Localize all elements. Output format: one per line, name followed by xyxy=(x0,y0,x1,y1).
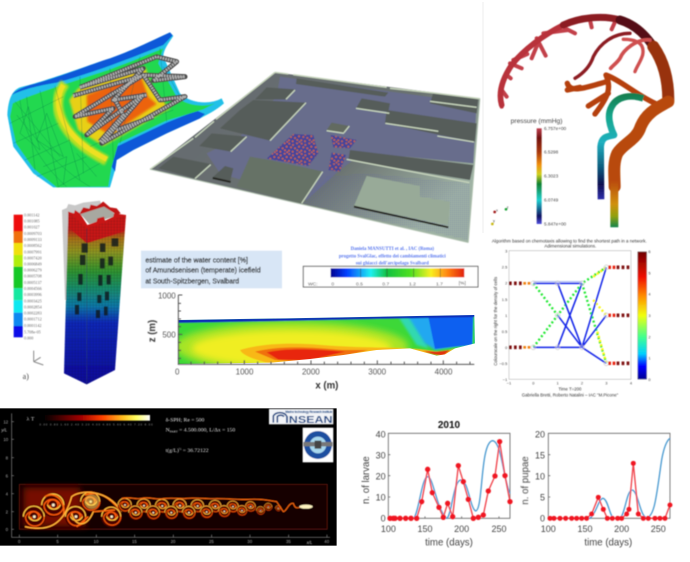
tower: colour legend: 0.001027 xyxy=(24,225,40,230)
stent: surface mesh xyxy=(10,48,180,187)
wake: axis labels: 2 xyxy=(6,509,9,514)
wake: large eddies xyxy=(23,505,46,528)
panel: chemotaxis network: 1 xyxy=(648,356,651,361)
tower: colour legend: 0.001085 xyxy=(24,219,40,224)
panel: chemotaxis network xyxy=(492,239,651,397)
glacier: axes and labels xyxy=(147,291,474,391)
tower: colour legend: 0.0001142 xyxy=(24,323,42,328)
tower: colour legend: 0.0004566 xyxy=(24,286,42,291)
wake: axis labels: 15 xyxy=(132,539,137,544)
glacier: axes and labels: 2000 xyxy=(302,367,320,376)
tower: battlement rear xyxy=(80,202,121,215)
wake: lower vortex row xyxy=(128,505,143,520)
wake: axis labels: 10 xyxy=(94,539,99,544)
glacier: axes and labels: x (m) xyxy=(315,380,338,391)
network: tick labels: 2.5 xyxy=(502,265,508,270)
pupae: axis tick labels: 10 xyxy=(535,471,545,481)
larvae: axis tick labels: 40 xyxy=(376,429,386,439)
panel: chemotaxis network: 6 xyxy=(648,249,651,254)
tower: corner edge xyxy=(86,228,88,384)
tower: colour legend: 0.0006849 xyxy=(24,261,42,266)
panel: pupae chart: 200 xyxy=(614,524,629,534)
wake: run parameters: ½ xyxy=(179,447,182,451)
stent: blue lower band xyxy=(112,111,205,172)
tower: top opening xyxy=(80,206,117,224)
glacier: axes and labels: 500 xyxy=(162,330,176,339)
panel: pupae chart: 250 xyxy=(651,524,666,534)
stent: wire body xyxy=(73,57,185,143)
stent: heated centre xyxy=(69,67,170,146)
network: y axis label: Colourscale on the right for the density of cells xyxy=(493,277,498,366)
glacier: WC legend: 0.7 xyxy=(382,281,389,287)
tower: colour legend: 0.0003425 xyxy=(24,298,42,303)
pupae: axis tick labels: 0 xyxy=(540,514,545,524)
glacier: WC legend: 1.7 xyxy=(436,281,443,287)
tower: colour legend: 0.001142 xyxy=(24,213,39,218)
plate: dark sheltered surfaces xyxy=(158,78,478,182)
wake: axis labels: y/L xyxy=(0,428,8,433)
vessels: main trunk xyxy=(614,102,668,187)
wake: axis labels: 5 xyxy=(56,539,59,544)
orientation axes: z xyxy=(507,205,509,209)
glacier: contour field xyxy=(178,315,475,364)
vessels: superior arch front xyxy=(500,25,563,105)
panel: SPH vortex wake: INSEAN xyxy=(285,415,333,426)
tower: undeformed ghost xyxy=(62,201,103,300)
plate: main particle cluster xyxy=(267,134,318,166)
glacier: WC legend: 1.2 xyxy=(409,281,416,287)
network: light top edge xyxy=(533,280,582,283)
pupae: observed markers xyxy=(550,463,670,518)
pressure legend: 5.847e+00 xyxy=(544,222,567,227)
glacier: WC legend xyxy=(303,266,478,287)
wake: red glow xyxy=(23,487,87,527)
panel: larvae chart: n. of larvae xyxy=(361,456,372,504)
panel: larvae chart: 250 xyxy=(491,524,506,534)
pressure legend: pressure (mmHg) xyxy=(511,118,562,125)
larvae: axis tick labels: 0 xyxy=(381,514,386,524)
network: title: Algorithm based on chemotaxis allowing to find the shortest path in a network. xyxy=(492,239,647,244)
stent: wire highlight xyxy=(73,57,185,143)
wake: axis labels: 30 xyxy=(247,539,253,544)
network: tick labels: 2 xyxy=(505,281,508,286)
tower: colour legend xyxy=(14,213,43,340)
pupae: axis titles: time (days) xyxy=(584,538,632,549)
vessels: deep red branches xyxy=(575,33,630,78)
panel: pupae chart: n. of pupae xyxy=(520,456,531,505)
wake: axis labels xyxy=(0,419,330,545)
tower: battlement xyxy=(68,210,126,243)
pupae: frame xyxy=(548,433,670,518)
glacier: WC legend: 0.5 xyxy=(356,281,363,287)
larvae: model curve xyxy=(388,441,510,518)
panel: stent finite element model xyxy=(7,32,224,187)
panel: pupae chart xyxy=(520,429,670,549)
pupae: observed line xyxy=(550,463,670,518)
wake: run parameters xyxy=(166,417,235,454)
pressure legend: 6.5298 xyxy=(544,149,559,154)
wake: bright eddy core xyxy=(84,494,99,509)
wake: axis labels: 0 xyxy=(6,527,9,532)
network: tick labels xyxy=(499,248,508,382)
plate: raised walls xyxy=(150,72,480,203)
wake: colour bar xyxy=(43,415,150,421)
wake: axis labels: 40 xyxy=(324,539,330,544)
pressure legend xyxy=(511,118,567,227)
wake: axis labels: 12 xyxy=(3,419,9,424)
panel: chemotaxis network: −1 xyxy=(507,381,512,386)
plate: dark slots xyxy=(213,178,448,227)
network: tick labels: 0.5 xyxy=(502,329,508,334)
plate: upper right cluster xyxy=(331,135,357,148)
wake: axis labels: 0 xyxy=(18,539,21,544)
tower: colour legend: 5.708e-05 xyxy=(24,329,41,334)
plate: main particle cluster water xyxy=(267,134,318,166)
panel: chemotaxis network: 0 xyxy=(648,377,651,382)
panel: tower displacement model xyxy=(14,201,126,384)
panel: SPH vortex wake: Marine technology Research Institute xyxy=(285,410,333,414)
wake: black background xyxy=(0,408,337,546)
wake: INSEAN logo xyxy=(269,409,333,424)
wake: axis labels: 6 xyxy=(6,473,9,478)
stent: orange core xyxy=(87,74,157,135)
tower: colour legend: 0.0009133 xyxy=(24,237,42,242)
glacier: project credit: Daniela MANSUTTI et al. , IAC (Roma) xyxy=(351,247,434,252)
panel: glacier water content xyxy=(141,247,478,391)
larvae: observed markers xyxy=(390,442,510,518)
wake: axis labels: 25 xyxy=(209,539,214,544)
plate: lighter obstacle xyxy=(354,176,450,225)
wake: round badge xyxy=(303,428,333,462)
tower: left face xyxy=(64,212,87,384)
panel: SPH vortex wake: 0.00 0.80 1.60 2.40 3.20 4.00 4.80 5.60 6.40 7.20 8.00 xyxy=(39,423,153,427)
glacier: axes and labels: 1000 xyxy=(236,367,254,376)
wake: axis labels: 8 xyxy=(6,455,9,460)
network: outflow segments xyxy=(608,267,617,363)
panel: pupae chart: 150 xyxy=(577,524,592,534)
panel: chemotaxis network: 0 xyxy=(532,381,535,386)
wake: shear layers xyxy=(25,492,122,528)
network: tick labels: 3 xyxy=(505,248,508,253)
pressure legend: 6.0749 xyxy=(544,197,559,202)
tower: colour legend: 0.0009703 xyxy=(24,231,42,236)
network: tick labels: 1.5 xyxy=(502,297,508,302)
panel: chemotaxis network: 4 xyxy=(648,292,651,297)
plate: lower right cluster xyxy=(328,153,346,172)
network: x label and credit: Time T=200 xyxy=(558,386,582,391)
glacier: description box: of Amundsenisen (temperate) icefield xyxy=(145,268,261,275)
glacier: description box xyxy=(141,251,282,288)
wake: axis labels: 4 xyxy=(6,491,9,496)
panel: pupae chart: 100 xyxy=(541,524,556,534)
pupae: axis tick labels: 15 xyxy=(535,450,545,460)
panel: chemotaxis network: 2 xyxy=(581,381,584,386)
panel: larvae chart: 100 xyxy=(381,524,396,534)
plate: dotted field lower right xyxy=(303,173,470,240)
orientation axes: x xyxy=(496,208,498,212)
glacier: description box: at South-Spitzbergen, Svalbard xyxy=(145,279,239,286)
plate: wall outline right xyxy=(150,99,480,243)
vessels: lower trunk xyxy=(602,180,626,227)
glacier: axes and labels: 4000 xyxy=(435,367,453,376)
panel: chemotaxis network: 5 xyxy=(648,270,651,275)
panel: cerebral vessels pressure xyxy=(491,17,668,227)
pressure legend: 6.757e+00 xyxy=(544,126,567,131)
tower: colour legend: 0.000 xyxy=(24,335,33,340)
wake: axes xyxy=(12,413,330,537)
tower: colour legend: 0.0007991 xyxy=(24,249,42,254)
vessels: teal carotid xyxy=(601,96,643,199)
panel: chemotaxis network: 1 xyxy=(557,381,560,386)
network: inflow segments xyxy=(509,283,523,347)
stent: yellow ring xyxy=(59,85,107,159)
vessels: front branches xyxy=(500,18,617,107)
network: tick labels: −1 xyxy=(503,377,508,382)
network: blue edges xyxy=(533,267,606,363)
larvae: axis tick labels: 10 xyxy=(376,493,386,503)
network: axes frame xyxy=(509,251,631,379)
stent: artery wall xyxy=(7,32,224,187)
panel: SPH vortex wake: λ T xyxy=(27,416,35,422)
pressure legend: 6.3023 xyxy=(544,173,559,178)
larvae: chart title: 2010 xyxy=(438,420,461,431)
vessels: dark crown xyxy=(620,20,653,47)
plate: block xyxy=(327,123,349,133)
pupae: axis tick labels: 20 xyxy=(535,429,545,439)
wake: run parameters: δ-SPH; Re = 500 xyxy=(166,417,205,423)
divider line xyxy=(482,2,484,233)
network: colourbar xyxy=(638,252,647,379)
network: node circles xyxy=(531,265,609,366)
tower: panel tag: a) xyxy=(23,372,29,381)
panel: particle flow over plate xyxy=(150,72,480,243)
wake: axis labels: 35 xyxy=(286,539,291,544)
vessels: superior arch crown xyxy=(563,17,620,25)
panel: chemotaxis network: 3 xyxy=(605,381,608,386)
tower: colour legend: 0.0005708 xyxy=(24,274,42,279)
larvae: observed line xyxy=(390,442,510,518)
tower: right face xyxy=(87,215,126,384)
glacier: project credit: sui ghiacci dell'arcipelago Svalbard xyxy=(356,261,429,266)
glacier: project credit: progetto SvalGlac, effetto dei cambiamenti climatici xyxy=(339,254,446,259)
tower: colour legend: 0.0008562 xyxy=(24,243,42,248)
glacier: project credit xyxy=(339,247,446,266)
tower: colour legend: 0.0002283 xyxy=(24,311,42,316)
glacier: axes and labels: 3000 xyxy=(368,367,387,376)
tower: colour legend: 0.0007420 xyxy=(24,255,42,260)
vessels: descending sinus xyxy=(653,47,668,100)
tower: windows xyxy=(75,238,118,318)
larvae: axis tick labels: 20 xyxy=(376,471,386,481)
larvae: frame xyxy=(388,433,510,518)
panel: chemotaxis network: 2 xyxy=(648,334,651,339)
panel: SPH vortex wake xyxy=(0,408,337,546)
tower: colour legend: 0.0001712 xyxy=(24,317,42,322)
tower: face mesh xyxy=(64,212,126,384)
glacier: WC legend: 0 xyxy=(331,281,334,287)
network: tick labels: 1 xyxy=(505,313,508,318)
panel: larvae chart xyxy=(361,420,510,549)
wake: filament tip xyxy=(299,505,313,509)
panel: larvae chart: 200 xyxy=(454,524,469,534)
network: green dotted edges xyxy=(533,267,606,363)
tower: colour legend: 0.0006279 xyxy=(24,268,42,273)
wake: run parameters: N xyxy=(166,427,170,433)
wake: run parameters: = 4.500.000, L/Δx = 150 xyxy=(178,427,235,433)
network: tick labels: −0.5 xyxy=(499,361,508,366)
glacier: WC legend: [%] xyxy=(459,280,466,286)
stent: blue upper band xyxy=(12,32,173,95)
wake: upper vortex row xyxy=(118,498,132,512)
pupae: axis tick labels xyxy=(535,429,545,524)
plate: lower right particles xyxy=(328,153,346,172)
orientation axes xyxy=(491,205,509,225)
wake: run parameters: = 36.72122 xyxy=(181,448,209,454)
wake: shear layer highlights xyxy=(25,492,122,528)
tower: colour legend: 0.0005137 xyxy=(24,280,42,285)
pupae: axis tick labels: 5 xyxy=(540,493,545,503)
wake: axis labels: 10 xyxy=(3,437,9,442)
tower: colour legend: 0.0002854 xyxy=(24,304,43,309)
panel: chemotaxis network: 4 xyxy=(630,381,633,386)
panel: larvae chart: 150 xyxy=(417,524,432,534)
larvae: axis tick labels: 30 xyxy=(376,450,386,460)
plate: blue dotted flow region xyxy=(207,77,477,200)
plate: upper right particles xyxy=(331,135,357,148)
tower: axes triad xyxy=(34,351,43,365)
pupae: model curve xyxy=(548,438,670,518)
stent: green interior xyxy=(10,48,215,187)
panel: chemotaxis network: Gabriella Bretti, Roberto Natalini – IAC "M.Picone" xyxy=(522,392,619,397)
glacier: WC legend: WC: xyxy=(308,281,318,287)
glacier: axes and labels: 0 xyxy=(175,367,180,376)
tower: colour legend: 0.0003996 xyxy=(24,292,42,297)
wake: run parameters: PART xyxy=(170,429,178,433)
stent: yellow ring glow xyxy=(58,83,107,161)
larvae: axis tick labels xyxy=(376,429,386,524)
glacier: axes and labels: z (m) xyxy=(147,320,158,342)
vessels: orange mid branches xyxy=(567,75,655,114)
wake: axis labels: x/L xyxy=(306,540,313,545)
network: yellow dotted edges xyxy=(593,267,606,363)
larvae: axis titles: time (days) xyxy=(425,538,473,549)
orientation axes: y xyxy=(493,219,495,223)
wake: glow field xyxy=(19,484,327,529)
wake: travelling filament xyxy=(122,498,300,512)
panel: chemotaxis network: Adimensional simulations. xyxy=(544,244,596,249)
glacier: axes and labels: 1000 xyxy=(158,291,176,300)
wake: axis labels: 20 xyxy=(171,539,176,544)
network: tick labels: 0 xyxy=(505,345,508,350)
wake: run parameters: t(g/L) xyxy=(166,448,179,454)
glacier: description box: estimate of the water content [%] xyxy=(145,257,248,264)
plate: base xyxy=(150,72,480,243)
panel: chemotaxis network: 3 xyxy=(648,313,651,318)
